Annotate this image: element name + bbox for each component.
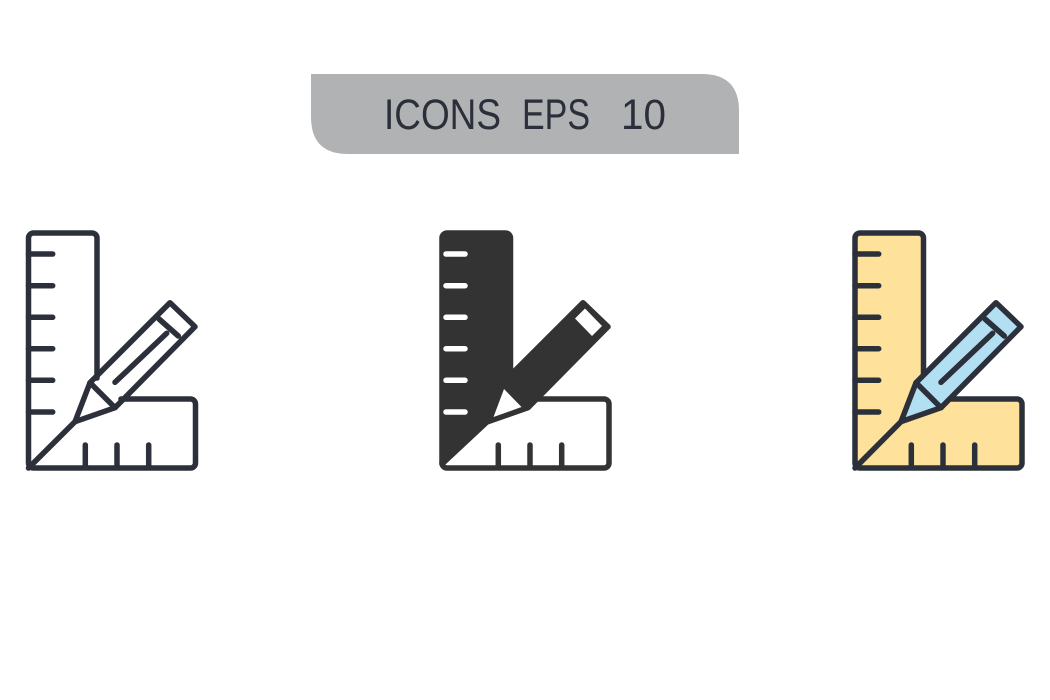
icon: coloured ruler and pencil bbox=[855, 233, 1022, 468]
banner background bbox=[311, 74, 739, 154]
icon: outline ruler and pencil bbox=[28, 233, 196, 468]
banner text: ICONS bbox=[384, 91, 501, 139]
banner text bbox=[384, 91, 666, 139]
title banner bbox=[311, 74, 739, 154]
icon: solid ruler and pencil bbox=[442, 233, 609, 468]
banner text: EPS bbox=[522, 91, 590, 139]
banner text: 10 bbox=[621, 91, 666, 139]
